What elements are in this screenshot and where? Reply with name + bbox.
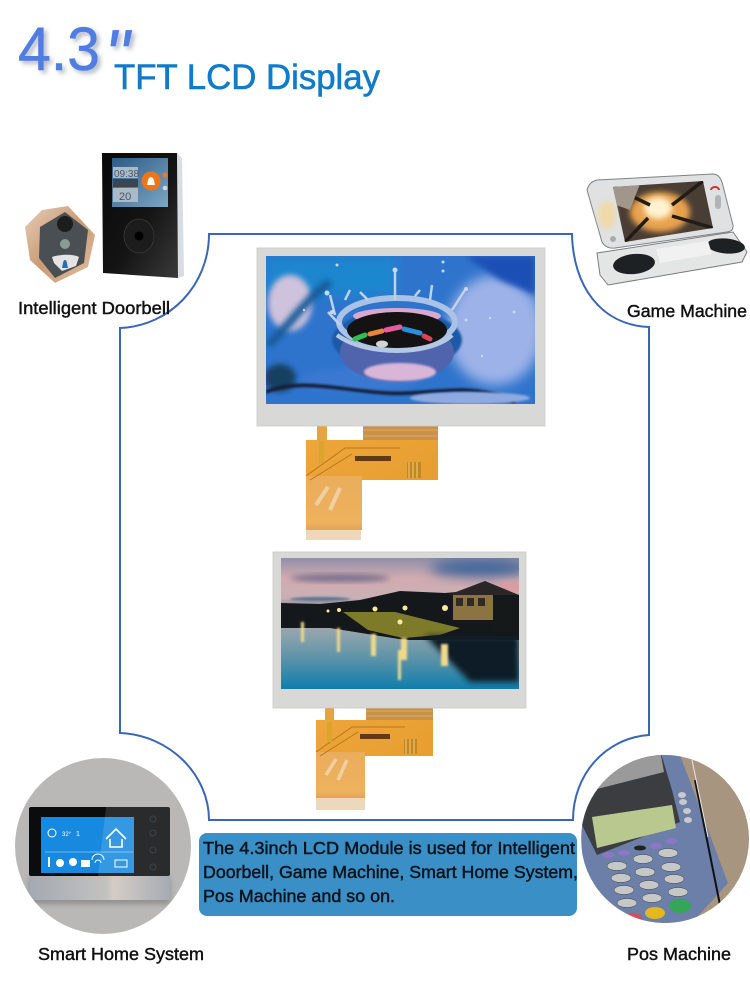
label: Pos Machine: Pos Machine (627, 944, 731, 964)
panel: top LCD module (257, 248, 545, 540)
doorbell monitor: 20 (119, 191, 131, 203)
blue outline frame (120, 234, 649, 820)
brushed wall circle (15, 758, 191, 934)
label: Game Machine: Game Machine (627, 301, 747, 321)
terminal body (580, 750, 728, 925)
icon: game machine (587, 174, 747, 285)
label: Intelligent Doorbell: Intelligent Doorbell (18, 298, 170, 318)
callout: description text box: The 4.3inch LCD Module is used for Intelligent (203, 838, 575, 858)
wall controller (29, 807, 170, 904)
icon: POS terminal (580, 750, 749, 925)
circular photo background (581, 755, 749, 923)
metal frame (257, 248, 545, 426)
doorbell monitor: 09:38 (114, 169, 139, 180)
callout: description text box (199, 833, 578, 916)
screen: lakeside sunset (281, 558, 530, 689)
title: TFT LCD Display: TFT LCD Display (114, 58, 380, 97)
title: 4.3 inch: '' (104, 16, 132, 96)
metal frame (273, 552, 526, 708)
icon: smart home panel (15, 758, 191, 934)
doorbell monitor (102, 153, 184, 278)
wall controller: 32° (62, 832, 72, 838)
wall controller: 1 (76, 831, 80, 838)
flexible cable (316, 707, 433, 810)
icon: intelligent doorbell devices (25, 153, 184, 283)
game console upper screen body (587, 174, 733, 248)
title: 4.3 inch: 4.3 (18, 15, 100, 83)
flexible cable (306, 426, 438, 540)
title: 4.3 inch (18, 15, 132, 96)
panel: bottom LCD module (273, 552, 530, 810)
label: Smart Home System: Smart Home System (38, 944, 204, 964)
screen: water splash (264, 256, 543, 404)
callout: description text box: Pos Machine and so on. (203, 886, 395, 906)
callout: description text box: Doorbell, Game Machine, Smart Home System, (203, 862, 578, 882)
game console lower body (597, 232, 747, 285)
doorbell camera (25, 206, 95, 283)
